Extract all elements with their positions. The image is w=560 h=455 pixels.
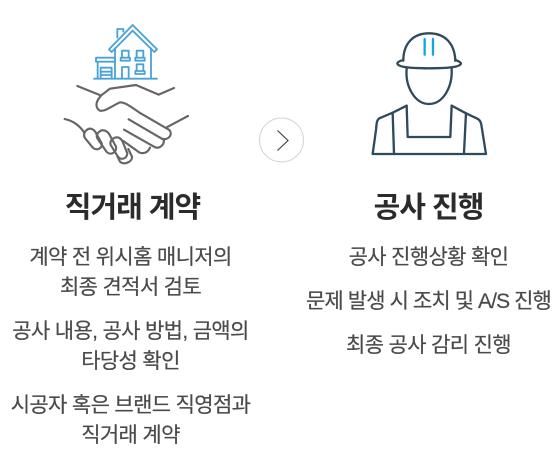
icon: handshake [65, 85, 188, 163]
text: left item 3: 시공자 혹은 브랜드 직영점과 [11, 394, 250, 417]
heading: direct contract: 직거래 계약 [65, 192, 200, 224]
text: left item 1: 계약 전 위시홈 매니저의 [29, 246, 232, 269]
arrow button [259, 118, 304, 162]
text: left item 3 [11, 394, 250, 447]
icon: helmet stripes [425, 39, 433, 55]
icon: house and handshake [64, 24, 488, 164]
icon: house [93, 25, 158, 79]
text: left item 1 [29, 246, 232, 299]
text: left item 2: 공사 내용, 공사 방법, 금액의 [12, 320, 249, 343]
text: right item 3: 최종 공사 감리 진행 [346, 334, 511, 357]
text: left item 2 [12, 320, 249, 373]
heading: construction progress: 공사 진행 [374, 192, 483, 224]
icon: worker [373, 33, 486, 154]
text: left item 1: 최종 견적서 검토 [60, 276, 201, 299]
text: left item 2: 타당성 확인 [81, 350, 180, 373]
text: right item 2: 문제 발생 시 조치 및 A/S 진행 [306, 290, 551, 313]
text: left item 3: 직거래 계약 [81, 424, 180, 447]
text: right item 1: 공사 진행상황 확인 [349, 246, 508, 269]
